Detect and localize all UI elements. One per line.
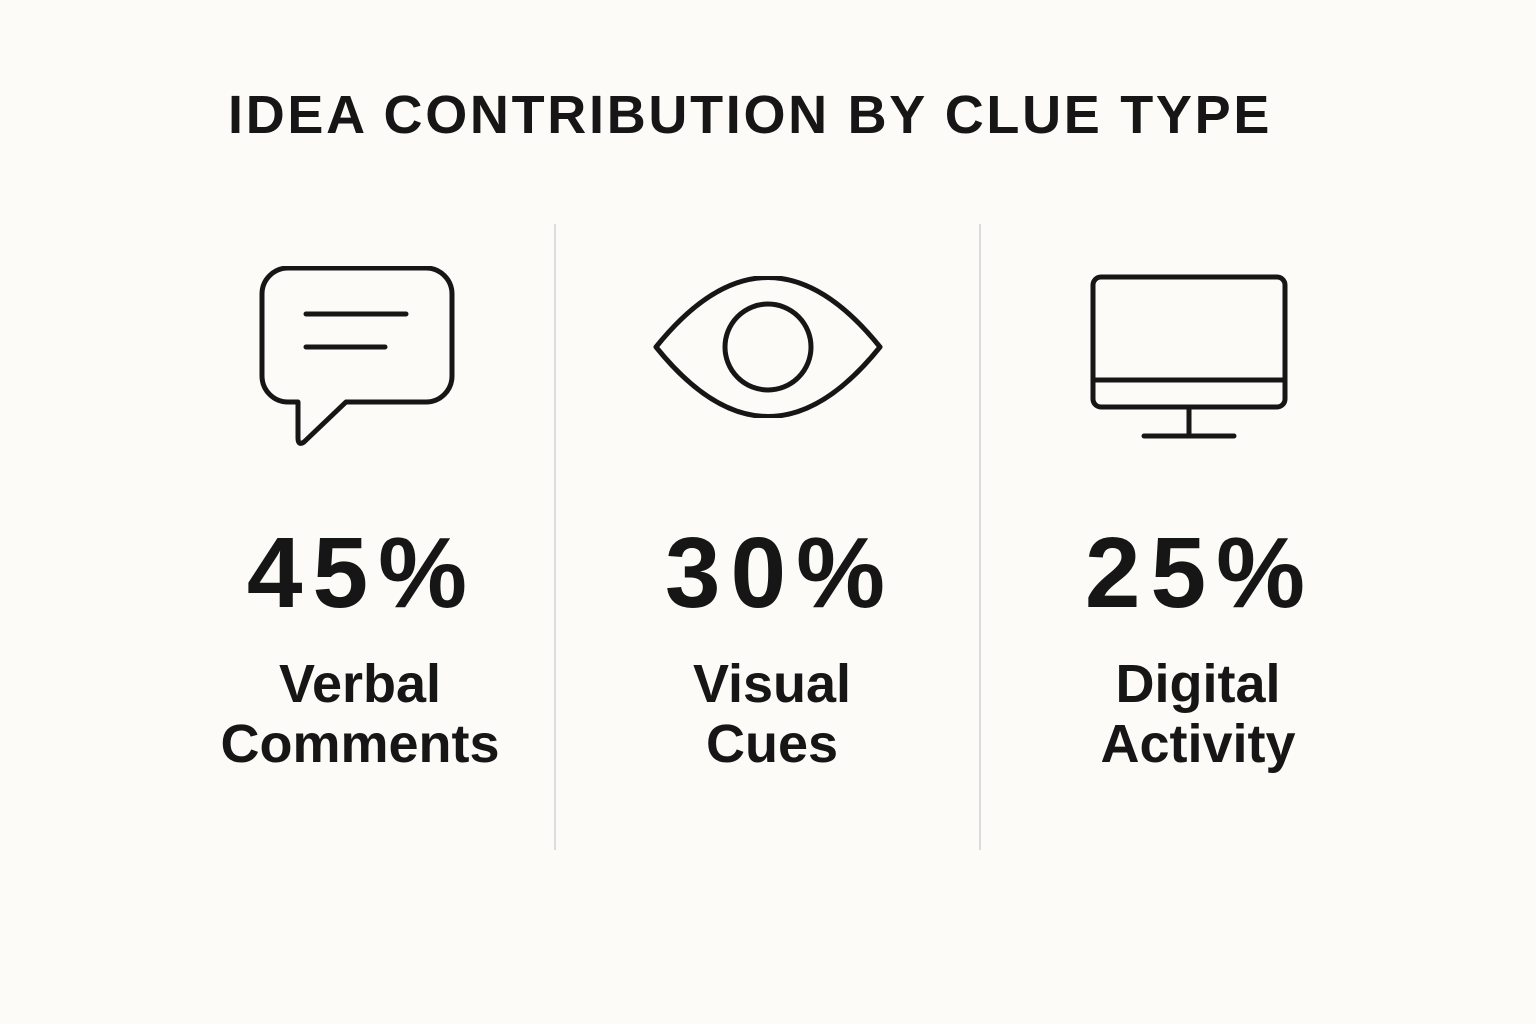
panel: verbal bbox=[220, 266, 500, 774]
icon: eye bbox=[653, 276, 883, 418]
label: Visual bbox=[693, 654, 851, 714]
label bbox=[693, 654, 851, 774]
label: Digital bbox=[1115, 654, 1280, 714]
label: Comments bbox=[220, 714, 500, 774]
label: Verbal bbox=[279, 654, 441, 714]
panel: visual bbox=[653, 276, 895, 774]
stat 45%: 45% bbox=[247, 517, 477, 629]
title: IDEA CONTRIBUTION BY CLUE TYPE bbox=[228, 85, 1272, 145]
icon: speech bubble bbox=[260, 266, 454, 446]
label: Activity bbox=[1100, 714, 1296, 774]
panel: digital bbox=[1085, 274, 1315, 774]
stat 30%: 30% bbox=[665, 517, 895, 629]
icon: monitor bbox=[1090, 274, 1288, 438]
label: Cues bbox=[706, 714, 838, 774]
stat 25%: 25% bbox=[1085, 517, 1315, 629]
label bbox=[1100, 654, 1296, 774]
label bbox=[220, 654, 500, 774]
